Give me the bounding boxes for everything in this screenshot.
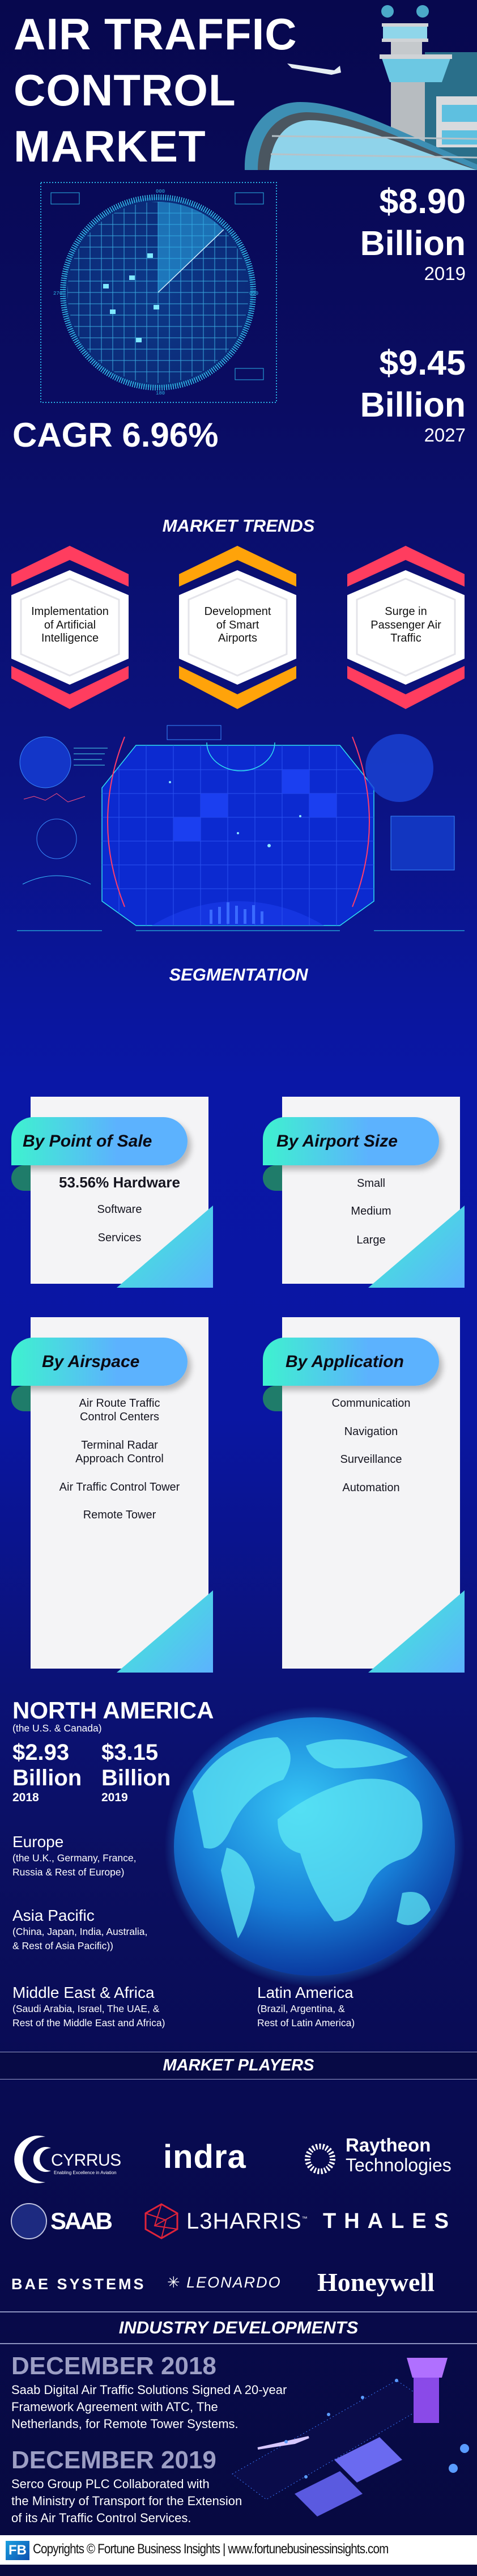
stat: NA 2018: Billion (12, 1766, 82, 1790)
trend: AI (31, 605, 109, 644)
development: dec 2018: Saab Digital Air Traffic Solutions Signed A 20-year (11, 2383, 287, 2397)
region: europe: (the U.K., Germany, France, (12, 1852, 136, 1864)
logo: thales: THALES (323, 2209, 457, 2233)
card: by airport size: Large (356, 1234, 386, 1246)
hexagon trends (11, 546, 465, 709)
logo: cyrrus: CYRRUS (51, 2151, 121, 2170)
stat: NA 2019: Billion (101, 1766, 171, 1790)
region: europe: Russia & Rest of Europe) (12, 1866, 124, 1878)
illustration: airport at night (232, 2358, 469, 2516)
stat: 2027 value: $9.45 (379, 343, 466, 382)
development: dec 2019: Serco Group PLC Collaborated with (11, 2477, 210, 2491)
card: by point of sale: 53.56% Hardware (59, 1174, 180, 1191)
logo: leonardo: ✳ LEONARDO (167, 2274, 282, 2291)
logo: bae systems: BAE SYSTEMS (11, 2276, 146, 2293)
logo: indra: indra (163, 2138, 246, 2175)
card: by airspace: Approach Control (75, 1453, 164, 1465)
radar display: 090 (249, 291, 258, 296)
region: latin america: Rest of Latin America) (257, 2017, 355, 2028)
plane (287, 63, 341, 75)
trend: AI: of Artificial (44, 619, 96, 631)
card: by application: Automation (342, 1482, 400, 1494)
stat: 2027 value: Billion (360, 385, 466, 424)
stat: 2027 value (360, 343, 466, 445)
globe (167, 1708, 462, 1985)
trend: smart airports (205, 605, 271, 644)
footer (0, 2535, 477, 2565)
stat: 2027 value: 2027 (424, 425, 466, 445)
development: dec 2018 (11, 2352, 287, 2431)
stat: NA 2019: $3.15 (101, 1740, 158, 1765)
logo: saab: SAAB (50, 2208, 111, 2234)
logos: market players (11, 2134, 457, 2297)
card: by airspace (31, 1317, 208, 1669)
stat: NA 2019: 2019 (101, 1791, 128, 1804)
heading: market players (0, 2052, 477, 2080)
heading: market players: MARKET PLAYERS (163, 2056, 314, 2074)
card: by airspace: Air Traffic Control Tower (59, 1481, 180, 1493)
ribbon (11, 1338, 188, 1386)
region: europe (12, 1833, 136, 1878)
card: by airport size: Medium (351, 1205, 391, 1217)
heading: market trends: MARKET TRENDS (163, 516, 314, 536)
trend: smart airports: of Smart (216, 619, 259, 631)
ribbon: By Airspace (42, 1352, 139, 1371)
logo: raytheon: Raytheon (346, 2134, 431, 2155)
card: by point of sale: Services (98, 1232, 141, 1244)
card: by point of sale: Software (97, 1203, 142, 1216)
region: asia pacific: Asia Pacific (12, 1907, 95, 1924)
stat: 2019 value: $8.90 (379, 182, 466, 220)
heading: segmentation: SEGMENTATION (169, 965, 308, 984)
card: by application: Navigation (344, 1425, 398, 1438)
card: by airspace: Control Centers (80, 1411, 159, 1423)
radar display: 000 (156, 189, 165, 194)
trend: smart airports: Airports (218, 632, 257, 644)
logo: raytheon (305, 2134, 452, 2175)
region: north america: (the U.S. & Canada) (12, 1722, 102, 1734)
development: dec 2018: DECEMBER 2018 (11, 2352, 216, 2380)
ribbon: By Application (286, 1352, 404, 1371)
region: middle east & africa: Rest of the Middle East and Africa) (12, 2017, 165, 2028)
stat: 2019 value: Billion (360, 224, 466, 262)
title: AIR TRAFFIC (14, 9, 297, 59)
card: by application: Surveillance (340, 1453, 402, 1466)
ribbon (263, 1117, 439, 1165)
stat: NA 2018: 2018 (12, 1791, 39, 1804)
development: dec 2019: DECEMBER 2019 (11, 2446, 216, 2474)
trend: passenger traffic (370, 605, 441, 644)
development: dec 2018: Netherlands, for Remote Tower Systems. (11, 2417, 238, 2431)
region: middle east & africa: (Saudi Arabia, Israel, The UAE, & (12, 2003, 159, 2014)
title: MARKET (14, 121, 206, 171)
region: asia pacific (12, 1907, 147, 1951)
region: asia pacific: & Rest of Asia Pacific)) (12, 1940, 113, 1951)
trend: AI: Implementation (31, 605, 109, 618)
development: dec 2019: of its Air Traffic Control Services. (11, 2511, 191, 2525)
illustration: control tower and terminal (245, 5, 477, 170)
card: by application (282, 1317, 460, 1669)
heading: industry developments (0, 2311, 477, 2344)
logo: cyrrus (14, 2136, 121, 2183)
ribbon (11, 1117, 188, 1165)
stat: NA 2019 (101, 1740, 171, 1804)
tech HUD illustration (17, 725, 465, 931)
icon: FBI logo: FB (8, 2543, 27, 2558)
card: by airport size (282, 1097, 460, 1284)
stat: CAGR: CAGR 6.96% (12, 416, 218, 454)
footer: Copyrights © Fortune Business Insights | www.fortunebusinessinsights.com (33, 2541, 388, 2557)
radar display: 180 (156, 391, 165, 396)
card: by airspace: Air Route Traffic (79, 1397, 160, 1410)
card: by airspace: Terminal Radar (81, 1439, 158, 1452)
region: middle east & africa (12, 1984, 165, 2028)
region: latin america: Latin America (257, 1984, 354, 2001)
card: by point of sale (31, 1097, 208, 1284)
logo: l3harris: L3HARRIS™ (186, 2209, 308, 2234)
region: europe: Europe (12, 1833, 63, 1851)
development: dec 2019 (11, 2446, 242, 2525)
logo: raytheon: Technologies (346, 2155, 452, 2175)
region: middle east & africa: Middle East & Africa (12, 1984, 155, 2001)
stat: 2019 value: 2019 (424, 263, 466, 284)
title (14, 9, 297, 171)
region: north america: NORTH AMERICA (12, 1697, 214, 1724)
stat: NA 2018 (12, 1740, 82, 1804)
logo: cyrrus: Enabling Excellence in Aviation (54, 2170, 117, 2175)
card: by airport size: Small (357, 1177, 385, 1190)
icon: FBI logo (6, 2541, 29, 2560)
region: latin america (257, 1984, 355, 2028)
stat: 2019 value (360, 182, 466, 284)
radar display (40, 182, 277, 403)
card: by application: Communication (332, 1397, 410, 1410)
heading: industry developments: INDUSTRY DEVELOPMENTS (119, 2318, 358, 2337)
logo: saab (11, 2203, 112, 2239)
region: asia pacific: (China, Japan, India, Australia, (12, 1926, 147, 1937)
radar display: 270 (53, 291, 62, 296)
ribbon: By Point of Sale (23, 1132, 152, 1151)
card: by airspace: Remote Tower (83, 1509, 156, 1521)
trend: AI: Intelligence (41, 632, 99, 644)
trend: passenger traffic: Traffic (390, 632, 421, 644)
trend: smart airports: Development (205, 605, 271, 618)
ribbon (263, 1338, 439, 1386)
title: CONTROL (14, 65, 236, 115)
logo: l3harris (145, 2203, 308, 2239)
trend: passenger traffic: Surge in (385, 605, 427, 618)
development: dec 2019: the Ministry of Transport for the Extension (11, 2494, 242, 2508)
stat: NA 2018: $2.93 (12, 1740, 69, 1765)
region: latin america: (Brazil, Argentina, & (257, 2003, 345, 2014)
ribbon: By Airport Size (276, 1132, 398, 1151)
trend: passenger traffic: Passenger Air (370, 619, 441, 631)
development: dec 2018: Framework Agreement with ATC, The (11, 2400, 218, 2414)
logo: honeywell: Honeywell (317, 2268, 435, 2297)
